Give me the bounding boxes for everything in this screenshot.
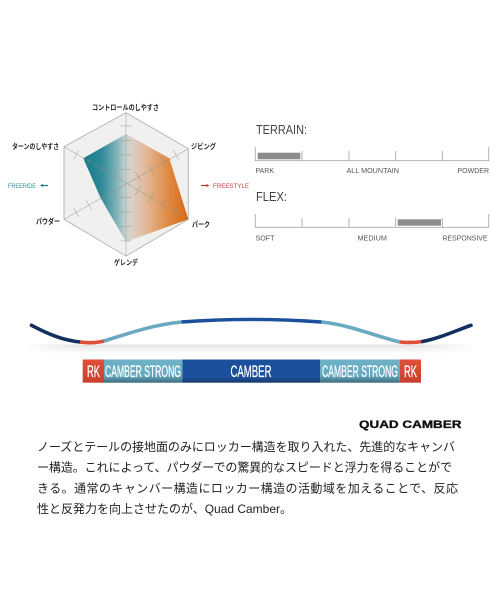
right camber strong segment	[320, 360, 400, 383]
right camber strong section	[322, 322, 400, 342]
ground shadow	[27, 344, 472, 354]
flex labels	[256, 234, 488, 242]
left camber strong segment	[104, 360, 182, 383]
freeride indicator: FREERIDE	[8, 183, 37, 190]
radar hexagon frame	[64, 113, 188, 256]
terrain labels: PARK	[256, 166, 274, 175]
left camber strong segment: CAMBER STRONG	[105, 362, 181, 381]
flex labels: MEDIUM	[358, 234, 387, 242]
left rocker contact	[80, 341, 104, 343]
terrain value bar	[258, 153, 300, 159]
tail rocker	[423, 325, 471, 342]
camber zone bar	[83, 360, 421, 383]
flex scale	[255, 190, 489, 242]
description text: ー構造。これによって、パウダーでの驚異的なスピードと浮力を得ることがで	[37, 460, 452, 474]
terrain heading: TERRAIN:	[256, 123, 307, 137]
terrain labels: POWDER	[458, 166, 490, 175]
flex labels: SOFT	[256, 234, 275, 242]
radar axis labels: パーク	[192, 220, 210, 229]
section heading: quad camber: QUAD CAMBER	[359, 419, 462, 431]
terrain axis	[255, 147, 489, 161]
freestyle indicator: FREESTYLE	[213, 183, 250, 190]
left RK segment: RK	[87, 362, 100, 381]
description text	[37, 439, 458, 516]
description text: ノーズとテールの接地面のみにロッカー構造を取り入れた、先進的なキャンバ	[37, 439, 455, 454]
description text: きる。通常のキャンバー構造にロッカー構造の活動域を加えることで、反応	[37, 482, 458, 496]
flex value bar	[398, 219, 441, 226]
flex axis	[255, 214, 489, 227]
right RK segment: RK	[404, 362, 417, 381]
radar axis labels: ジビング	[191, 142, 217, 151]
flex heading: FLEX:	[256, 190, 287, 204]
left RK segment	[83, 360, 104, 383]
radar axis labels: コントロールのしやすさ	[92, 103, 159, 112]
radar axis labels: パウダー	[36, 217, 60, 226]
center camber segment: CAMBER	[230, 362, 272, 381]
radar axis labels	[12, 103, 217, 267]
description text: 性と反発力を向上させたのが、Quad Camber。	[37, 501, 292, 516]
terrain labels	[256, 166, 490, 175]
nose rocker	[32, 325, 80, 342]
left camber strong section	[104, 322, 182, 341]
flex labels: RESPONSIVE	[442, 234, 488, 242]
right RK segment	[400, 360, 421, 383]
center camber segment	[182, 360, 320, 383]
snowboard profile	[27, 319, 472, 354]
center camber section	[182, 319, 322, 322]
radar axis labels: ゲレンデ	[114, 258, 139, 267]
right camber strong segment: CAMBER STRONG	[322, 362, 398, 381]
radar data shape	[83, 134, 188, 242]
terrain scale	[255, 123, 490, 175]
right rocker contact	[400, 340, 423, 344]
radar axis labels: ターンのしやすさ	[12, 142, 59, 151]
radar chart	[12, 103, 217, 267]
radar spokes and ticks	[64, 113, 188, 256]
terrain labels: ALL MOUNTAIN	[346, 166, 399, 175]
